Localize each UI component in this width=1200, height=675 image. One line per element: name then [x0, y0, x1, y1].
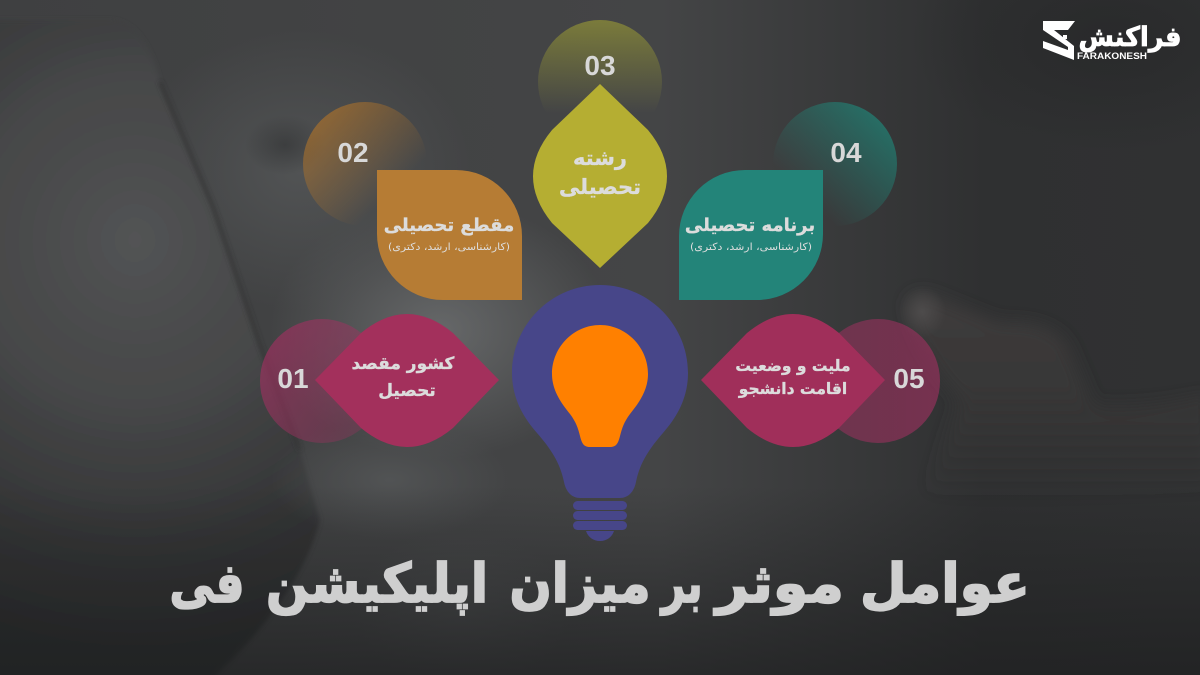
icon: logo mark: [1043, 21, 1075, 60]
petal 02: degree level: [377, 170, 522, 300]
title: اپلیکیشن: [266, 552, 488, 615]
item 01 number circle: [260, 319, 384, 443]
item 03 number circle: [538, 20, 662, 144]
item 01 number circle: 01: [277, 363, 309, 394]
title: [170, 552, 1030, 615]
petal 01: destination country: کشور مقصد: [352, 354, 455, 374]
petal 05: nationality and residency: اقامت دانشجو: [738, 380, 847, 398]
item 02 number circle: [303, 102, 427, 226]
laptop lid: [0, 20, 320, 675]
item 05 number circle: 05: [893, 363, 925, 394]
petal 05: nationality and residency: ملیت و وضعیت: [735, 357, 851, 375]
petal 03: field of study: [533, 84, 667, 268]
petal 04: study program: (کارشناسی، ارشد، دکتری): [690, 242, 812, 253]
logo: Farakonesh: [1043, 21, 1182, 61]
petal 01: destination country: تحصیل: [378, 381, 436, 401]
title: عوامل: [860, 552, 1030, 615]
logo wordmark latin: FARAKONESH: [1077, 51, 1147, 61]
bulb filament: [552, 325, 648, 447]
title: موثر: [713, 552, 844, 615]
title: فی: [170, 552, 244, 615]
item 04 number circle: 04: [830, 137, 862, 168]
item 05 number circle: [816, 319, 940, 443]
petal 04: study program: [679, 170, 823, 300]
blurred hand: [907, 294, 1200, 501]
title: میزان: [510, 552, 650, 615]
petal 04: study program: برنامه تحصیلی: [685, 215, 815, 236]
icon: light bulb: [512, 285, 688, 541]
logo wordmark persian: فراکنش: [1078, 22, 1182, 53]
petal 02: degree level: مقطع تحصیلی: [384, 215, 514, 236]
petal 02: degree level: (کارشناسی، ارشد، دکتری): [388, 242, 510, 253]
item 02 number circle: 02: [337, 137, 369, 168]
item 03 number circle: 03: [584, 50, 616, 81]
petal 01: destination country: [315, 314, 499, 447]
petal 05: nationality and residency: [701, 314, 885, 447]
petal 03: field of study: تحصیلی: [559, 175, 641, 199]
item 04 number circle: [773, 102, 897, 226]
title: بر: [659, 552, 702, 615]
petal 03: field of study: رشته: [573, 146, 627, 170]
